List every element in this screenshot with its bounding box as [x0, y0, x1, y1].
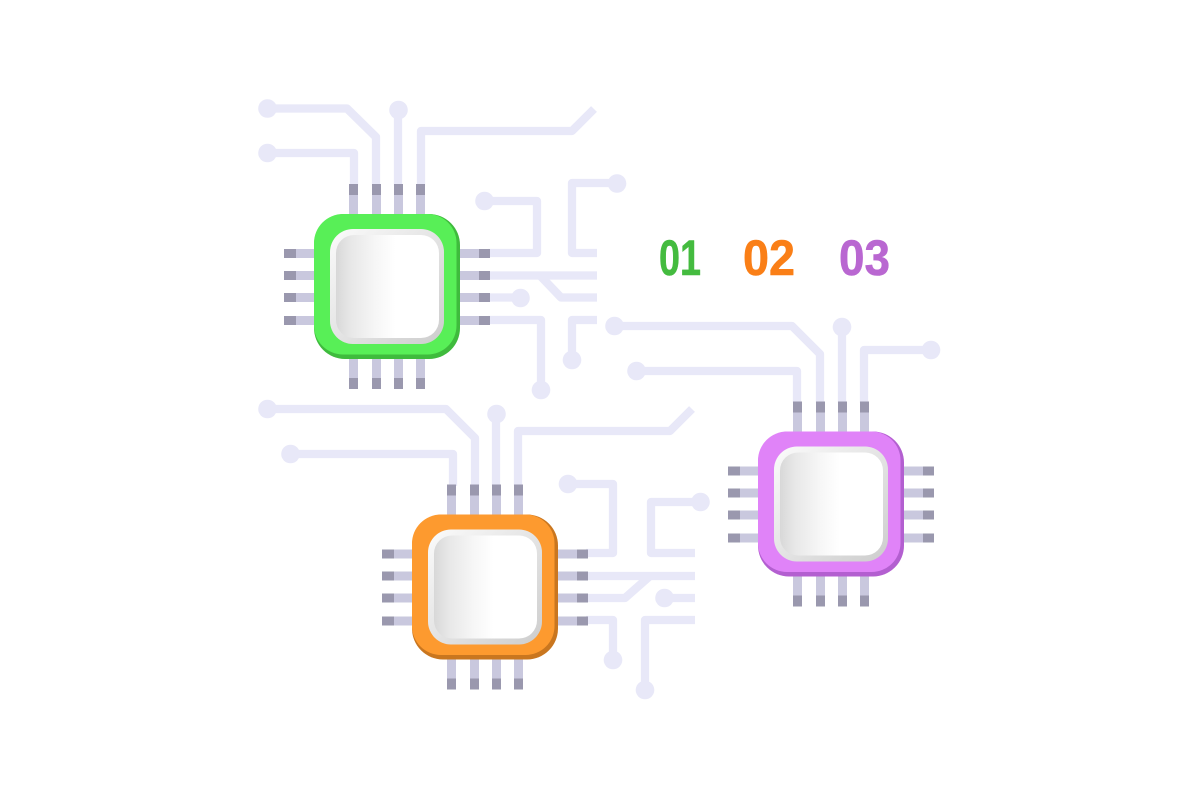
label: 02: 02	[743, 230, 795, 286]
chip: purple	[728, 402, 934, 606]
chip: orange	[382, 484, 588, 690]
circuit traces: orange chip	[258, 400, 710, 699]
circuit traces: purple chip	[605, 317, 940, 403]
circuit traces: green chip	[258, 99, 626, 399]
chip: green	[284, 184, 490, 389]
label: 03: 03	[839, 230, 890, 286]
label: 01: 01	[659, 230, 701, 286]
